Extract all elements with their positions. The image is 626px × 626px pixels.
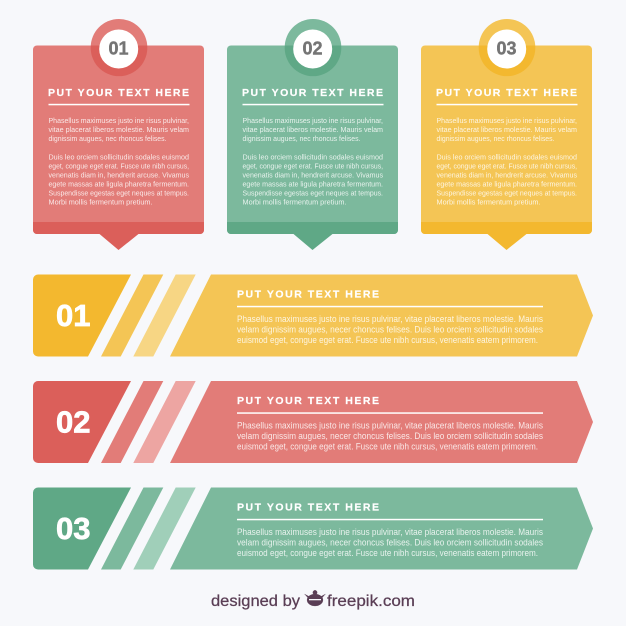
card 03 text: dignissim augues, nec rhoncus felises. (436, 134, 554, 143)
banner 02 heading: PUT YOUR TEXT HERE (237, 395, 379, 407)
banner 01 number block (33, 274, 131, 356)
card 01 text: dignissim augues, nec rhoncus felises. (48, 134, 166, 143)
banner 03 text: velam dignissim augues, necer choncus felises. Duis leo orciem sollicitudin sodales (237, 538, 543, 548)
banner 02 text: euismod eget, congue eget erat. Fusce ute nibh cursus, venenatis eatem primorem. (237, 442, 538, 452)
card 02 text: Morbi mollis fermentum pretium. (242, 198, 346, 206)
card 02 number badge (285, 19, 341, 76)
card 01 number badge (91, 19, 147, 76)
banner 03 rule (237, 519, 543, 520)
banner 02 number: 02 (56, 404, 90, 440)
credit text left: designed by (211, 593, 300, 610)
card 03 text: Phasellus maximuses justo ine risus pulvinar, (436, 116, 577, 125)
banner 01 text: euismod eget, congue eget erat. Fusce ute nibh cursus, venenatis eatem primorem. (237, 335, 538, 345)
banner 01 stripe one (101, 274, 163, 356)
panel: card 01 (33, 19, 204, 250)
footer credit (211, 590, 415, 610)
card 02 heading: PUT YOUR TEXT HERE (242, 87, 383, 99)
card 03 number badge (479, 19, 535, 76)
banner 02 text: velam dignissim augues, necer choncus felises. Duis leo orciem sollicitudin sodales (237, 431, 543, 441)
banner 02 rule (237, 412, 543, 414)
card 02 text (242, 116, 383, 206)
card 03 text: vitae placerat liberos molestie. Mauris velam (436, 125, 577, 134)
banner 01 number: 01 (56, 298, 90, 333)
banner 02 stripe two (133, 381, 196, 463)
card 01 text: vitae placerat liberos molestie. Mauris velam (48, 125, 189, 134)
card 01 text: egete massas ate ligula pharetra fermentum. (48, 180, 189, 188)
card 01 text: Suspendisse egestas eget neques at tempus. (48, 188, 189, 198)
card 02 text: Duis leo orciem sollicitudin sodales euismod (242, 152, 383, 162)
banner 03 stripe two (133, 488, 196, 570)
panel: card 02 (227, 19, 398, 250)
banner 03 number block (33, 488, 131, 570)
card 02 text: egete massas ate ligula pharetra fermentum. (242, 180, 383, 188)
card 03 text: venenatis diam in, hendrerit arcuse. Vivamus (436, 170, 577, 180)
card 01 text: Duis leo orciem sollicitudin sodales euismod (48, 152, 189, 162)
card 03 pointer (488, 234, 526, 250)
card 01 heading: PUT YOUR TEXT HERE (48, 87, 189, 99)
card 01 text: venenatis diam in, hendrerit arcuse. Vivamus (48, 170, 189, 180)
card 02 text: vitae placerat liberos molestie. Mauris velam (242, 125, 383, 134)
card 03 text: eget, congue eget erat. Fusce ute nibh cursus, (436, 162, 577, 170)
card 01 number badge: 01 (108, 39, 129, 59)
card 02 text: Phasellus maximuses justo ine risus pulvinar, (242, 116, 383, 125)
card 03 rule (436, 104, 578, 105)
card 02 footer band (227, 222, 398, 234)
banner 03 arrow body (170, 488, 593, 570)
card 03 text: egete massas ate ligula pharetra fermentum. (436, 180, 577, 188)
banner 03 text: euismod eget, congue eget erat. Fusce ute nibh cursus, venenatis eatem primorem. (237, 548, 538, 558)
banner 01 arrow body (170, 274, 593, 356)
banner 01 stripe two (133, 274, 196, 356)
banner 02 text (237, 420, 543, 452)
panel: banner 03 (33, 488, 593, 570)
card 02 text: eget, congue eget erat. Fusce ute nibh cursus, (242, 162, 383, 170)
card 02 text: dignissim augues, nec rhoncus felises. (242, 134, 360, 143)
card 03 text: Morbi mollis fermentum pretium. (436, 198, 540, 206)
card 03 text: Suspendisse egestas eget neques at tempus. (436, 188, 577, 198)
banner 01 heading: PUT YOUR TEXT HERE (237, 288, 379, 300)
banner 02 text: Phasellus maximuses justo ine risus pulvinar, vitae placerat liberos molestie. Mauris (237, 420, 543, 430)
card 03 number badge: 03 (496, 39, 517, 59)
card 01 text: Morbi mollis fermentum pretium. (48, 198, 152, 206)
banner 03 stripe one (101, 488, 163, 570)
card 02 body (227, 46, 398, 234)
banner 02 stripe one (101, 381, 163, 463)
card 02 text: venenatis diam in, hendrerit arcuse. Vivamus (242, 170, 383, 180)
card 02 pointer (294, 234, 332, 250)
banner 03 heading: PUT YOUR TEXT HERE (237, 502, 379, 514)
banner 02 arrow body (170, 381, 593, 463)
card 03 text (436, 116, 577, 206)
card 01 text: eget, congue eget erat. Fusce ute nibh cursus, (48, 162, 189, 170)
card 01 text: Phasellus maximuses justo ine risus pulvinar, (48, 116, 189, 125)
card 03 body (421, 46, 592, 234)
card 02 number badge: 02 (302, 39, 323, 59)
credit text right: freepik.com (327, 593, 415, 610)
card 03 footer band (421, 222, 592, 234)
panel: banner 02 (33, 381, 593, 463)
card 01 body (33, 46, 204, 234)
banner 02 number block (33, 381, 131, 463)
card 01 rule (48, 104, 190, 105)
banner 01 rule (237, 306, 543, 307)
card 03 heading: PUT YOUR TEXT HERE (436, 87, 577, 99)
panel: banner 01 (33, 274, 593, 356)
card 02 text: Suspendisse egestas eget neques at tempus. (242, 188, 383, 198)
banner 03 text (237, 527, 543, 558)
card 01 footer band (33, 222, 204, 234)
banner 03 text: Phasellus maximuses justo ine risus pulvinar, vitae placerat liberos molestie. Mauris (237, 527, 543, 537)
banner 03 number: 03 (56, 511, 90, 546)
card 01 text (48, 116, 189, 206)
card 03 text: Duis leo orciem sollicitudin sodales euismod (436, 152, 577, 162)
card 02 rule (242, 104, 384, 105)
banner 01 text: velam dignissim augues, necer choncus felises. Duis leo orciem sollicitudin sodales (237, 324, 543, 334)
panel: card 03 (421, 19, 592, 250)
banner 01 text: Phasellus maximuses justo ine risus pulvinar, vitae placerat liberos molestie. Mauris (237, 314, 543, 324)
icon: freepik crown (304, 590, 326, 606)
card 01 pointer (100, 234, 138, 250)
banner 01 text (237, 314, 543, 345)
